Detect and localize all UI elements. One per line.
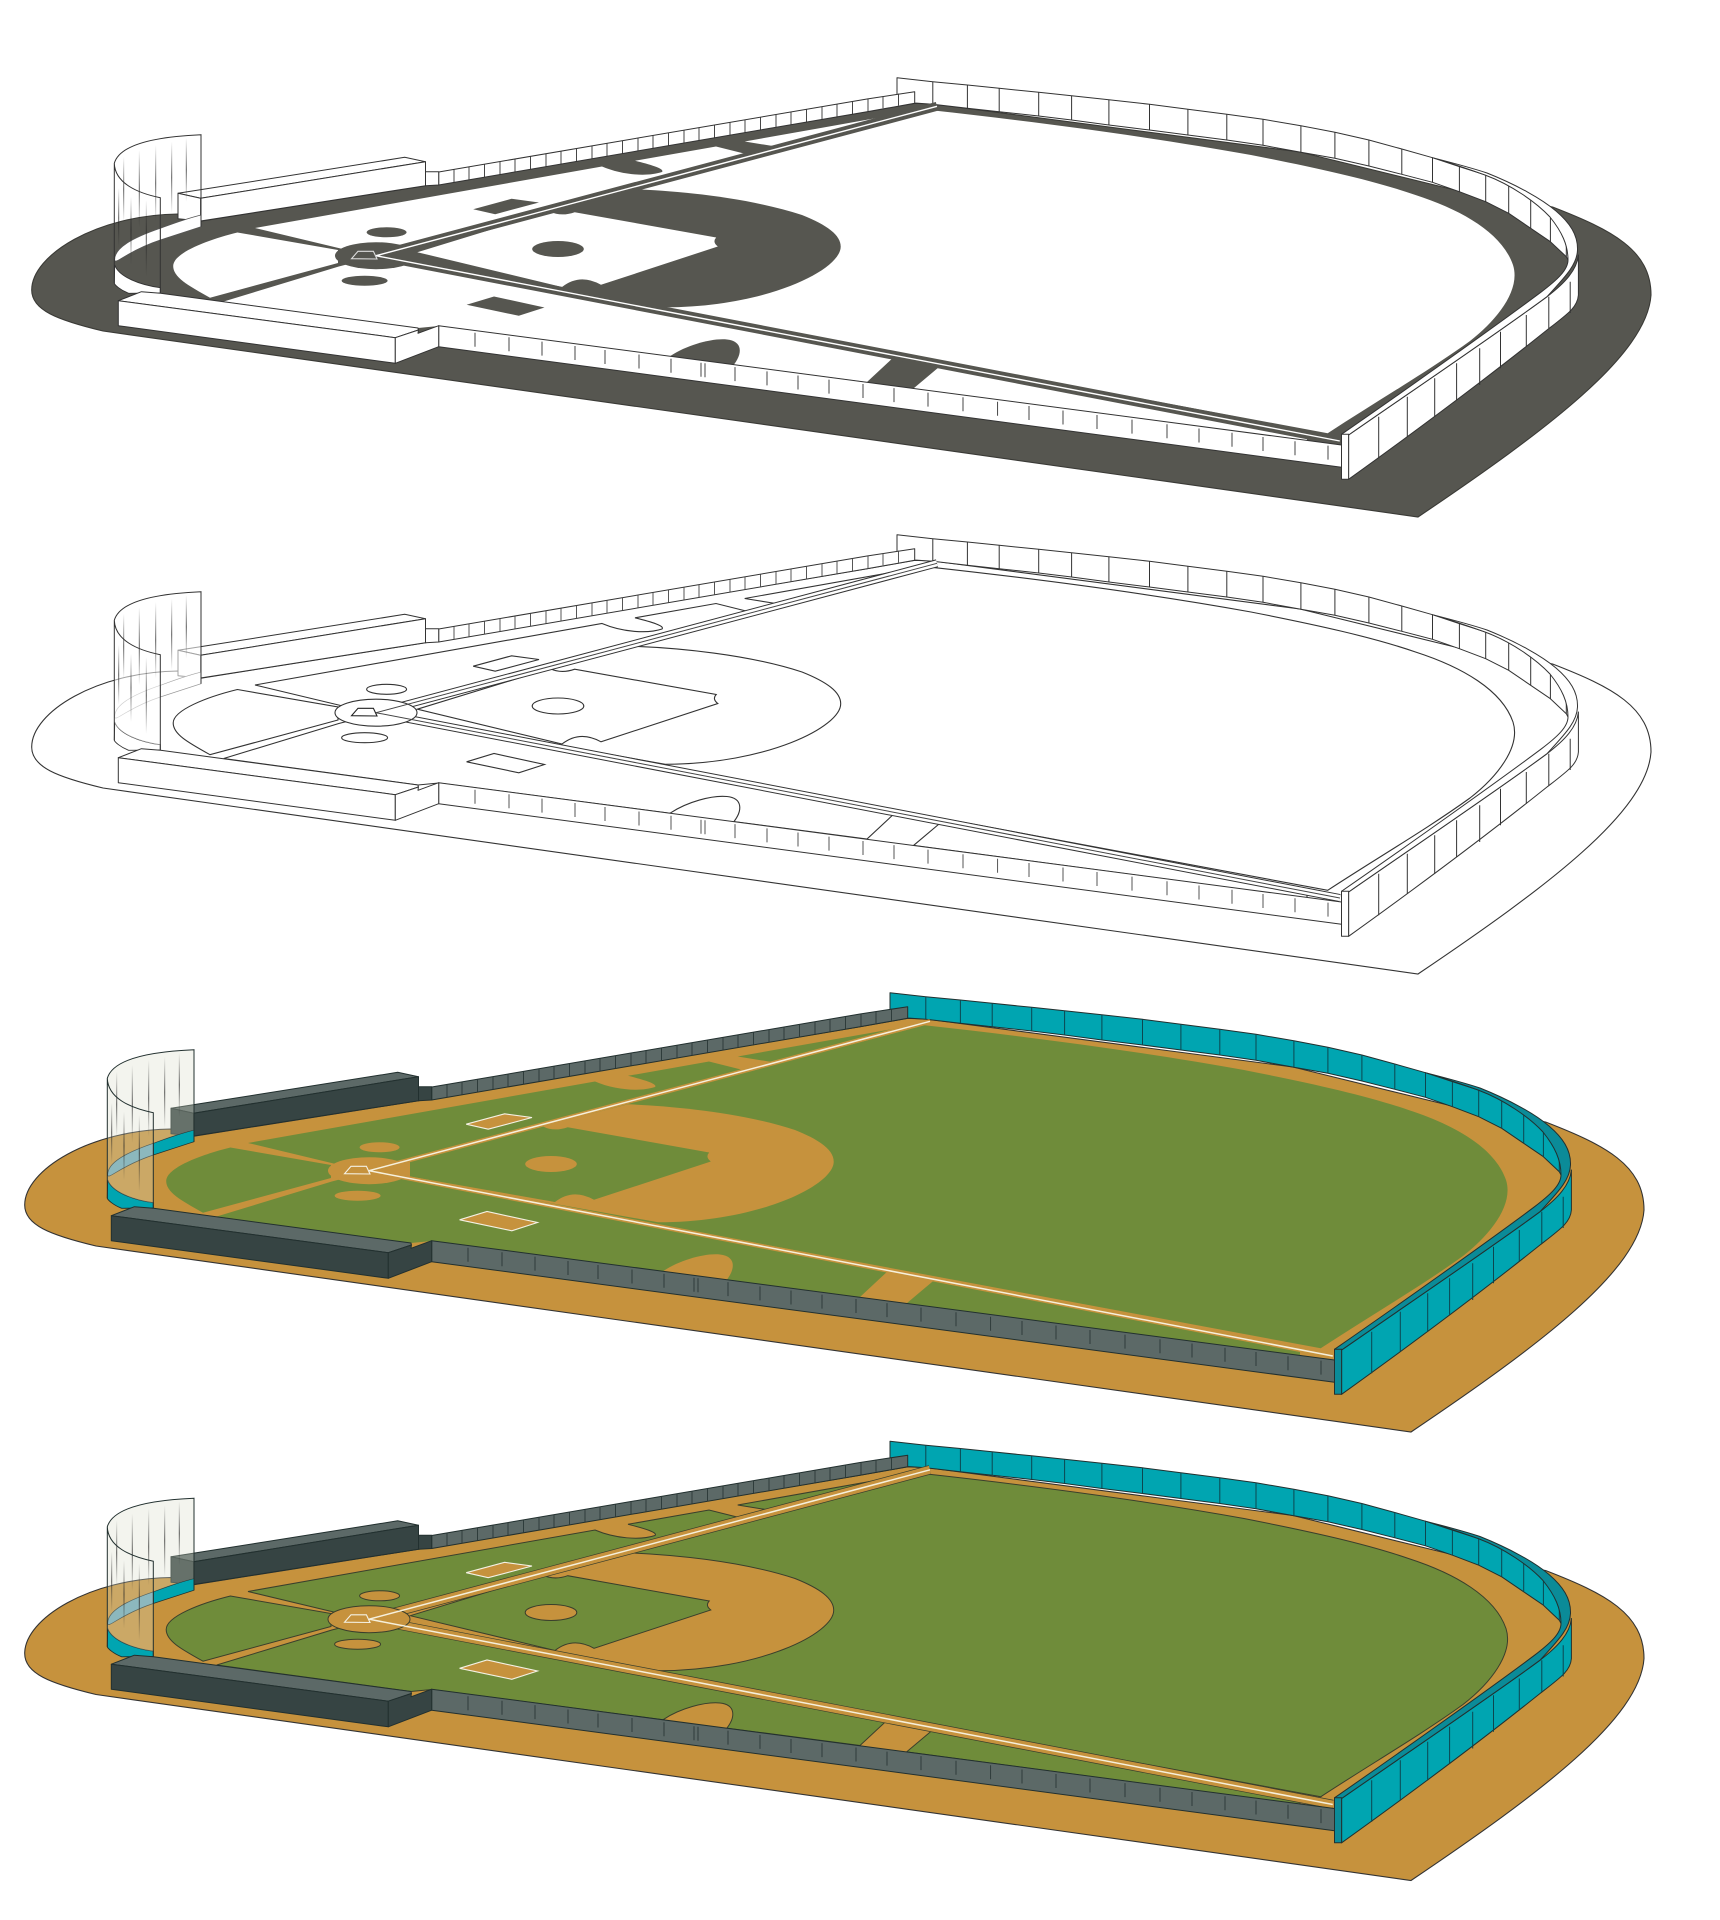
diamond grass extension toward the foul lines bbox=[417, 212, 562, 287]
lower far foul sliver bbox=[914, 364, 1307, 441]
home circle bbox=[335, 242, 417, 269]
bullpen mound bbox=[667, 339, 740, 367]
backstop grass bbox=[173, 232, 338, 298]
upper dark grandstand bbox=[171, 1521, 432, 1584]
on-deck circle upper bbox=[367, 227, 407, 237]
upper far foul sliver bbox=[745, 110, 922, 148]
lower foul wall bbox=[439, 326, 1342, 467]
outfield back wall bbox=[897, 78, 1575, 260]
dirt apron bbox=[25, 1018, 1644, 1432]
outfield and infield grass bbox=[376, 110, 1515, 433]
teal back wall bbox=[890, 1441, 1568, 1624]
coach box upper bbox=[473, 199, 539, 214]
upper grandstand outline bbox=[178, 614, 439, 678]
lower foul territory bbox=[224, 257, 896, 382]
upper grey wall bbox=[432, 1455, 908, 1548]
curved glass backstop bbox=[114, 135, 201, 293]
green field bbox=[166, 1021, 1508, 1356]
infield diamond bbox=[417, 212, 718, 287]
lower foul wall outline bbox=[439, 783, 1342, 924]
teal back wall bbox=[890, 993, 1568, 1175]
outfield front wall outline bbox=[1342, 615, 1578, 936]
teal front wall bbox=[1334, 1073, 1571, 1394]
teal front wall bbox=[1334, 1521, 1571, 1843]
upper grey wall bbox=[432, 1007, 908, 1100]
lower grandstand outline bbox=[118, 749, 439, 820]
field outline bbox=[173, 563, 1515, 898]
outlined green field bbox=[166, 1470, 1508, 1804]
glass backstop outline bbox=[114, 592, 201, 750]
upper dark grandstand bbox=[171, 1072, 432, 1136]
upper low wall outline bbox=[439, 549, 915, 642]
lower grandstand block bbox=[118, 292, 439, 363]
lower dark grandstand bbox=[111, 1655, 432, 1727]
glass backstop bbox=[107, 1498, 194, 1657]
glass backstop bbox=[107, 1050, 194, 1208]
playing field: grass, dirt and foul lines bbox=[173, 106, 1515, 441]
coach box lower bbox=[467, 296, 544, 316]
on-deck circle lower bbox=[342, 276, 388, 286]
dirt apron bbox=[25, 1467, 1644, 1880]
panel: colour stadium with outlines bbox=[25, 1441, 1644, 1880]
pitcher's mound bbox=[532, 241, 584, 257]
lower grey wall bbox=[432, 1241, 1334, 1382]
upper foul territory bbox=[255, 146, 752, 249]
panel: silhouette stadium with dark dirt bbox=[32, 78, 1651, 517]
outfield front wall with cap bbox=[1342, 158, 1578, 479]
panel: flat colour stadium bbox=[25, 993, 1644, 1432]
upper grandstand block bbox=[178, 157, 439, 221]
ground outline bbox=[32, 560, 1651, 974]
lower grey wall bbox=[432, 1689, 1334, 1831]
outfield back wall outline bbox=[897, 535, 1575, 717]
upper low wall bbox=[439, 92, 915, 185]
foul strips bbox=[376, 106, 1340, 441]
home plate bbox=[352, 251, 377, 259]
ground apron bbox=[32, 103, 1651, 517]
panel: line drawing stadium bbox=[32, 535, 1651, 974]
infield dirt arc bbox=[376, 189, 841, 307]
lower dark grandstand bbox=[111, 1207, 432, 1278]
foul lines bbox=[376, 106, 1340, 441]
